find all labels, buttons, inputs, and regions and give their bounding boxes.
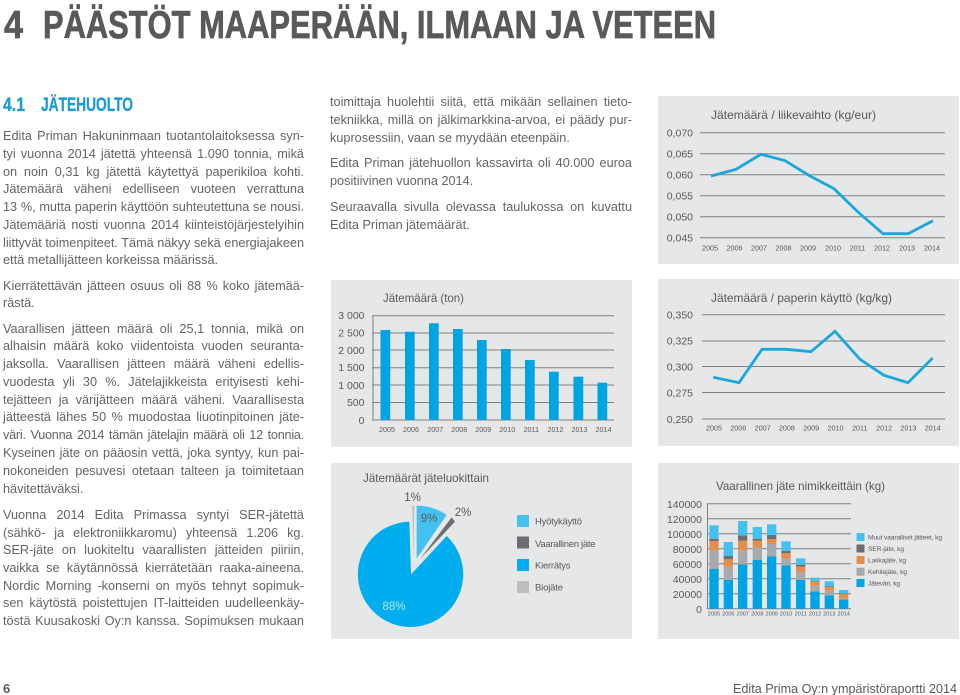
panel: hazardous waste stacked bar chart: 60000 xyxy=(673,559,702,571)
panel: waste by category pie chart: Jätemäärät jäteluokittain xyxy=(363,471,489,485)
title: PÄÄSTÖT MAAPERÄÄN, ILMAAN JA VETEEN xyxy=(43,4,716,47)
panel: waste by category pie chart: 1% xyxy=(404,492,421,504)
title: 4 xyxy=(4,4,23,47)
text block: left column: Vaarallisen jätteen määrä oli 25,1 tonnia, mikä on xyxy=(3,322,304,336)
panel: waste amount bar chart: 1 500 xyxy=(338,362,365,374)
panel: waste per paper use line chart: 0,350 xyxy=(667,310,693,322)
panel: waste amount bar chart: Jätemäärä (ton) xyxy=(383,291,464,305)
text block: left column: tyi vuonna 2014 jätettä yhteensä 1.090 tonnia, mikä xyxy=(3,147,304,161)
panel: waste per paper use line chart: 2013 xyxy=(900,424,916,433)
panel: waste per paper use line chart: 2009 xyxy=(803,424,819,433)
stacked bar legend: Muut vaaralliset jätteet, kg xyxy=(868,534,942,542)
panel: waste by category pie chart: 88% xyxy=(382,601,406,613)
text block: left column: rästä. xyxy=(3,296,35,310)
pie slices xyxy=(358,506,463,627)
text block: left column: jaksolla. Vaarallisen jätteen määrä väheni edellis- xyxy=(3,357,304,371)
panel: hazardous waste stacked bar chart: 2005 xyxy=(708,612,720,618)
text block: middle column: toimittaja huolehtii siitä, että mikään sellainen tieto- xyxy=(330,95,632,109)
text block: left column: tejätteen ja värijätteen määrä väheni. Vaarallisesta xyxy=(3,393,304,407)
text block: left column: sen käytöstä poistettujen IT-laitteiden uudelleenkäy- xyxy=(3,596,304,610)
stacked bar legend: Jäteväri, kg xyxy=(868,580,900,588)
panel: hazardous waste stacked bar chart: 80000 xyxy=(673,544,702,556)
panel: waste per turnover line chart: 2013 xyxy=(899,244,915,253)
text block: left column: 13 %, mutta paperin käyttöön suhteutettuna se nousi. xyxy=(3,200,304,214)
panel: waste per turnover line chart: 0,050 xyxy=(667,212,693,224)
panel: waste amount bar chart: 2008 xyxy=(451,425,467,434)
panel: waste per turnover line chart: 0,055 xyxy=(667,190,693,202)
pie legend xyxy=(517,515,596,594)
panel: waste amount bar chart: 2013 xyxy=(572,425,588,434)
text block: left column: että metallijätteen korkeissa määrissä. xyxy=(3,253,218,267)
text block: left column: vaikka se käytännössä kierrätetään raaka-aineena. xyxy=(3,561,304,575)
panel: waste by category pie chart: 2% xyxy=(455,507,471,519)
panel: waste amount bar chart: 2010 xyxy=(499,425,515,434)
panel: waste per paper use line chart: 0,275 xyxy=(667,388,693,400)
panel: hazardous waste stacked bar chart xyxy=(658,463,959,639)
panel: waste amount bar chart: 1 000 xyxy=(338,380,365,392)
panel: waste per paper use line chart: 2011 xyxy=(852,424,868,433)
panel: hazardous waste stacked bar chart: 140000 xyxy=(667,499,702,511)
panel: waste per turnover line chart: Jätemäärä / liikevaihto (kg/eur) xyxy=(711,108,876,122)
panel: waste by category pie chart xyxy=(331,463,632,639)
text block: left column: (sähkö- ja elektroniikkaromu) yhteensä 1.206 kg. xyxy=(3,526,304,540)
text block: middle column: Edita Priman jätemäärät. xyxy=(330,218,470,232)
panel: hazardous waste stacked bar chart: 2006 xyxy=(722,612,735,618)
panel: hazardous waste stacked bar chart: 2007 xyxy=(736,612,749,618)
panel: waste per turnover line chart: 2005 xyxy=(702,244,718,253)
text block: middle column xyxy=(330,95,632,232)
panel: hazardous waste stacked bar chart: 2009 xyxy=(765,612,778,618)
text block: left column: vuodesta yli 30 %. Jätelajikkeista erityisesti kehi- xyxy=(3,375,304,389)
panel: waste amount bar chart: 2009 xyxy=(475,425,491,434)
panel: waste per paper use line chart: 2005 xyxy=(706,424,722,433)
panel: waste per turnover line chart: 0,045 xyxy=(667,232,693,244)
panel: hazardous waste stacked bar chart: 20000 xyxy=(673,589,702,601)
panel: waste per turnover line chart: 2014 xyxy=(924,244,940,253)
text block: middle column: positiivinen vuonna 2014. xyxy=(330,174,473,188)
panel: hazardous waste stacked bar chart: 2008 xyxy=(751,612,764,618)
panel: waste amount bar chart: 2 000 xyxy=(338,345,365,357)
panel: waste per turnover line chart: 2012 xyxy=(874,244,890,253)
text block: left column: liittyvät toimenpiteet. Tämä näkyy sekä energiajakeen xyxy=(3,236,304,250)
panel: hazardous waste stacked bar chart: 100000 xyxy=(667,529,702,541)
panel: waste amount bar chart: 2007 xyxy=(427,425,443,434)
panel: waste amount bar chart: 3 000 xyxy=(338,310,365,322)
text block: middle column: Edita Priman jätehuollon kassavirta oli 40.000 euroa xyxy=(330,156,632,170)
stacked bar legend xyxy=(856,533,942,588)
panel: hazardous waste stacked bar chart: 2013 xyxy=(823,612,836,618)
text block: left column: väri. Vuonna 2014 tämän jätelajin määrä oli 12 tonnia. xyxy=(3,428,304,442)
panel: waste amount bar chart: 2011 xyxy=(524,425,539,434)
panel: waste by category pie chart: 9% xyxy=(421,513,437,525)
panel: hazardous waste stacked bar chart: 120000 xyxy=(667,514,702,526)
panel: waste per turnover line chart xyxy=(658,96,959,264)
panel: hazardous waste stacked bar chart: 2011 xyxy=(795,612,807,618)
panel: hazardous waste stacked bar chart: 2014 xyxy=(837,612,850,618)
panel: hazardous waste stacked bar chart: 40000 xyxy=(673,574,702,586)
section heading: JÄTEHUOLTO xyxy=(41,95,133,116)
pie legend: Biojäte xyxy=(535,582,563,594)
panel: waste per paper use line chart: 2012 xyxy=(876,424,892,433)
text block: left column: hävitettäväksi. xyxy=(3,482,83,496)
panel: waste per paper use line chart: 0,325 xyxy=(667,336,693,348)
section heading xyxy=(3,95,133,116)
panel: waste per turnover line chart: 2009 xyxy=(800,244,816,253)
panel: waste per turnover line chart: 0,065 xyxy=(667,148,693,160)
text block: middle column: kuprosessiin, vaan se myydään eteenpäin. xyxy=(330,131,570,145)
stacked bar legend: SER-jäte, kg xyxy=(868,546,904,553)
panel: waste per paper use line chart: 2007 xyxy=(755,424,771,433)
text block: left column: alhaisin määrä koko viidentoista vuoden seuranta- xyxy=(3,339,304,353)
panel: waste per paper use line chart: 2014 xyxy=(925,424,941,433)
panel: hazardous waste stacked bar chart: 2010 xyxy=(780,612,792,618)
text block: left column: Nordic Morning -konserni on myös tehnyt sopimuk- xyxy=(3,579,304,593)
panel: hazardous waste stacked bar chart: 0 xyxy=(696,604,702,616)
panel: hazardous waste stacked bar chart: 2012 xyxy=(809,612,821,618)
panel: waste amount bar chart xyxy=(331,280,632,447)
text block: left column: Edita Priman Hakuninmaan tuotantolaitoksessa syn- xyxy=(3,129,304,143)
panel: waste per turnover line chart: 2008 xyxy=(776,244,792,253)
panel: waste amount bar chart: 500 xyxy=(347,397,365,409)
text block: left column xyxy=(2,129,304,628)
stacked bar legend: Kehitejäte, kg xyxy=(868,569,907,576)
panel: waste amount bar chart: 2014 xyxy=(596,425,612,434)
text block: middle column: Seuraavalla sivulla olevassa taulukossa on kuvattu xyxy=(330,200,632,214)
text block: middle column: tekniikka, millä on jälkimarkkina-arvoa, ei päädy pur- xyxy=(330,113,632,127)
text block: left column: Jätemääriä nosti vuonna 2014 kiinteistöjärjestelyihin xyxy=(3,218,304,232)
panel: waste per turnover line chart: 0,060 xyxy=(667,170,693,182)
panel: waste amount bar chart: 2 500 xyxy=(338,328,365,340)
pie legend: Hyötykäyttö xyxy=(535,516,582,528)
section heading: 4.1 xyxy=(3,95,25,116)
panel: waste per turnover line chart: 2010 xyxy=(825,244,841,253)
panel: waste per paper use line chart: 2010 xyxy=(828,424,844,433)
panel: waste per paper use line chart: 0,250 xyxy=(667,414,693,426)
text block: left column: Kierrätettävän jätteen osuus oli 88 % koko jätemää- xyxy=(3,279,304,293)
panel: waste amount bar chart: 0 xyxy=(359,415,365,427)
panel: waste per turnover line chart: 0,070 xyxy=(667,128,693,140)
panel: hazardous waste stacked bar chart: Vaarallinen jäte nimikkeittäin (kg) xyxy=(716,479,885,493)
text block: left column: SER-jäte on luokiteltu vaarallisten jätteiden piiriin, xyxy=(3,543,304,557)
panel: waste per turnover line chart: 2007 xyxy=(751,244,767,253)
panel: waste per paper use line chart xyxy=(658,279,959,446)
panel: waste per paper use line chart: 2008 xyxy=(779,424,795,433)
panel: waste per turnover line chart: 2011 xyxy=(850,244,865,253)
panel: waste per paper use line chart: 0,300 xyxy=(667,362,693,374)
text block: left column: on noin 0,31 kg jätettä käytettyä paperikiloa kohti. xyxy=(3,165,304,179)
panel: waste amount bar chart: 2006 xyxy=(403,425,419,434)
stacked bars xyxy=(709,521,848,609)
pie legend: Vaarallinen jäte xyxy=(535,539,596,550)
pie legend: Kierrätys xyxy=(535,560,571,572)
panel: waste per paper use line chart: Jätemäärä / paperin käyttö (kg/kg) xyxy=(711,291,892,305)
panel: waste per turnover line chart: 2006 xyxy=(726,244,742,253)
text block: left column: nokoneiden pesuvesi otetaan talteen ja toimitetaan xyxy=(3,464,304,478)
panel: waste amount bar chart: 2005 xyxy=(379,425,395,434)
panel: waste amount bar chart: 2012 xyxy=(548,425,564,434)
text block: left column: Jätemäärä väheni edelliseen vuoteen verrattuna xyxy=(3,182,304,196)
text block: left column: töstä Kuusakoski Oy:n kanssa. Sopimuksen mukaan xyxy=(3,614,304,628)
stacked bar legend: Lakkajäte, kg xyxy=(868,558,906,564)
text block: left column: Vuonna 2014 Edita Primassa syntyi SER-jätettä xyxy=(3,508,304,522)
text block: left column: jätteestä lähes 50 % muodostaa liuotinpitoinen jäte- xyxy=(3,410,304,424)
text block: left column: Kyseinen jäte on pääosin vettä, joka syntyy, kun pai- xyxy=(3,446,304,460)
panel: waste per paper use line chart: 2006 xyxy=(730,424,746,433)
